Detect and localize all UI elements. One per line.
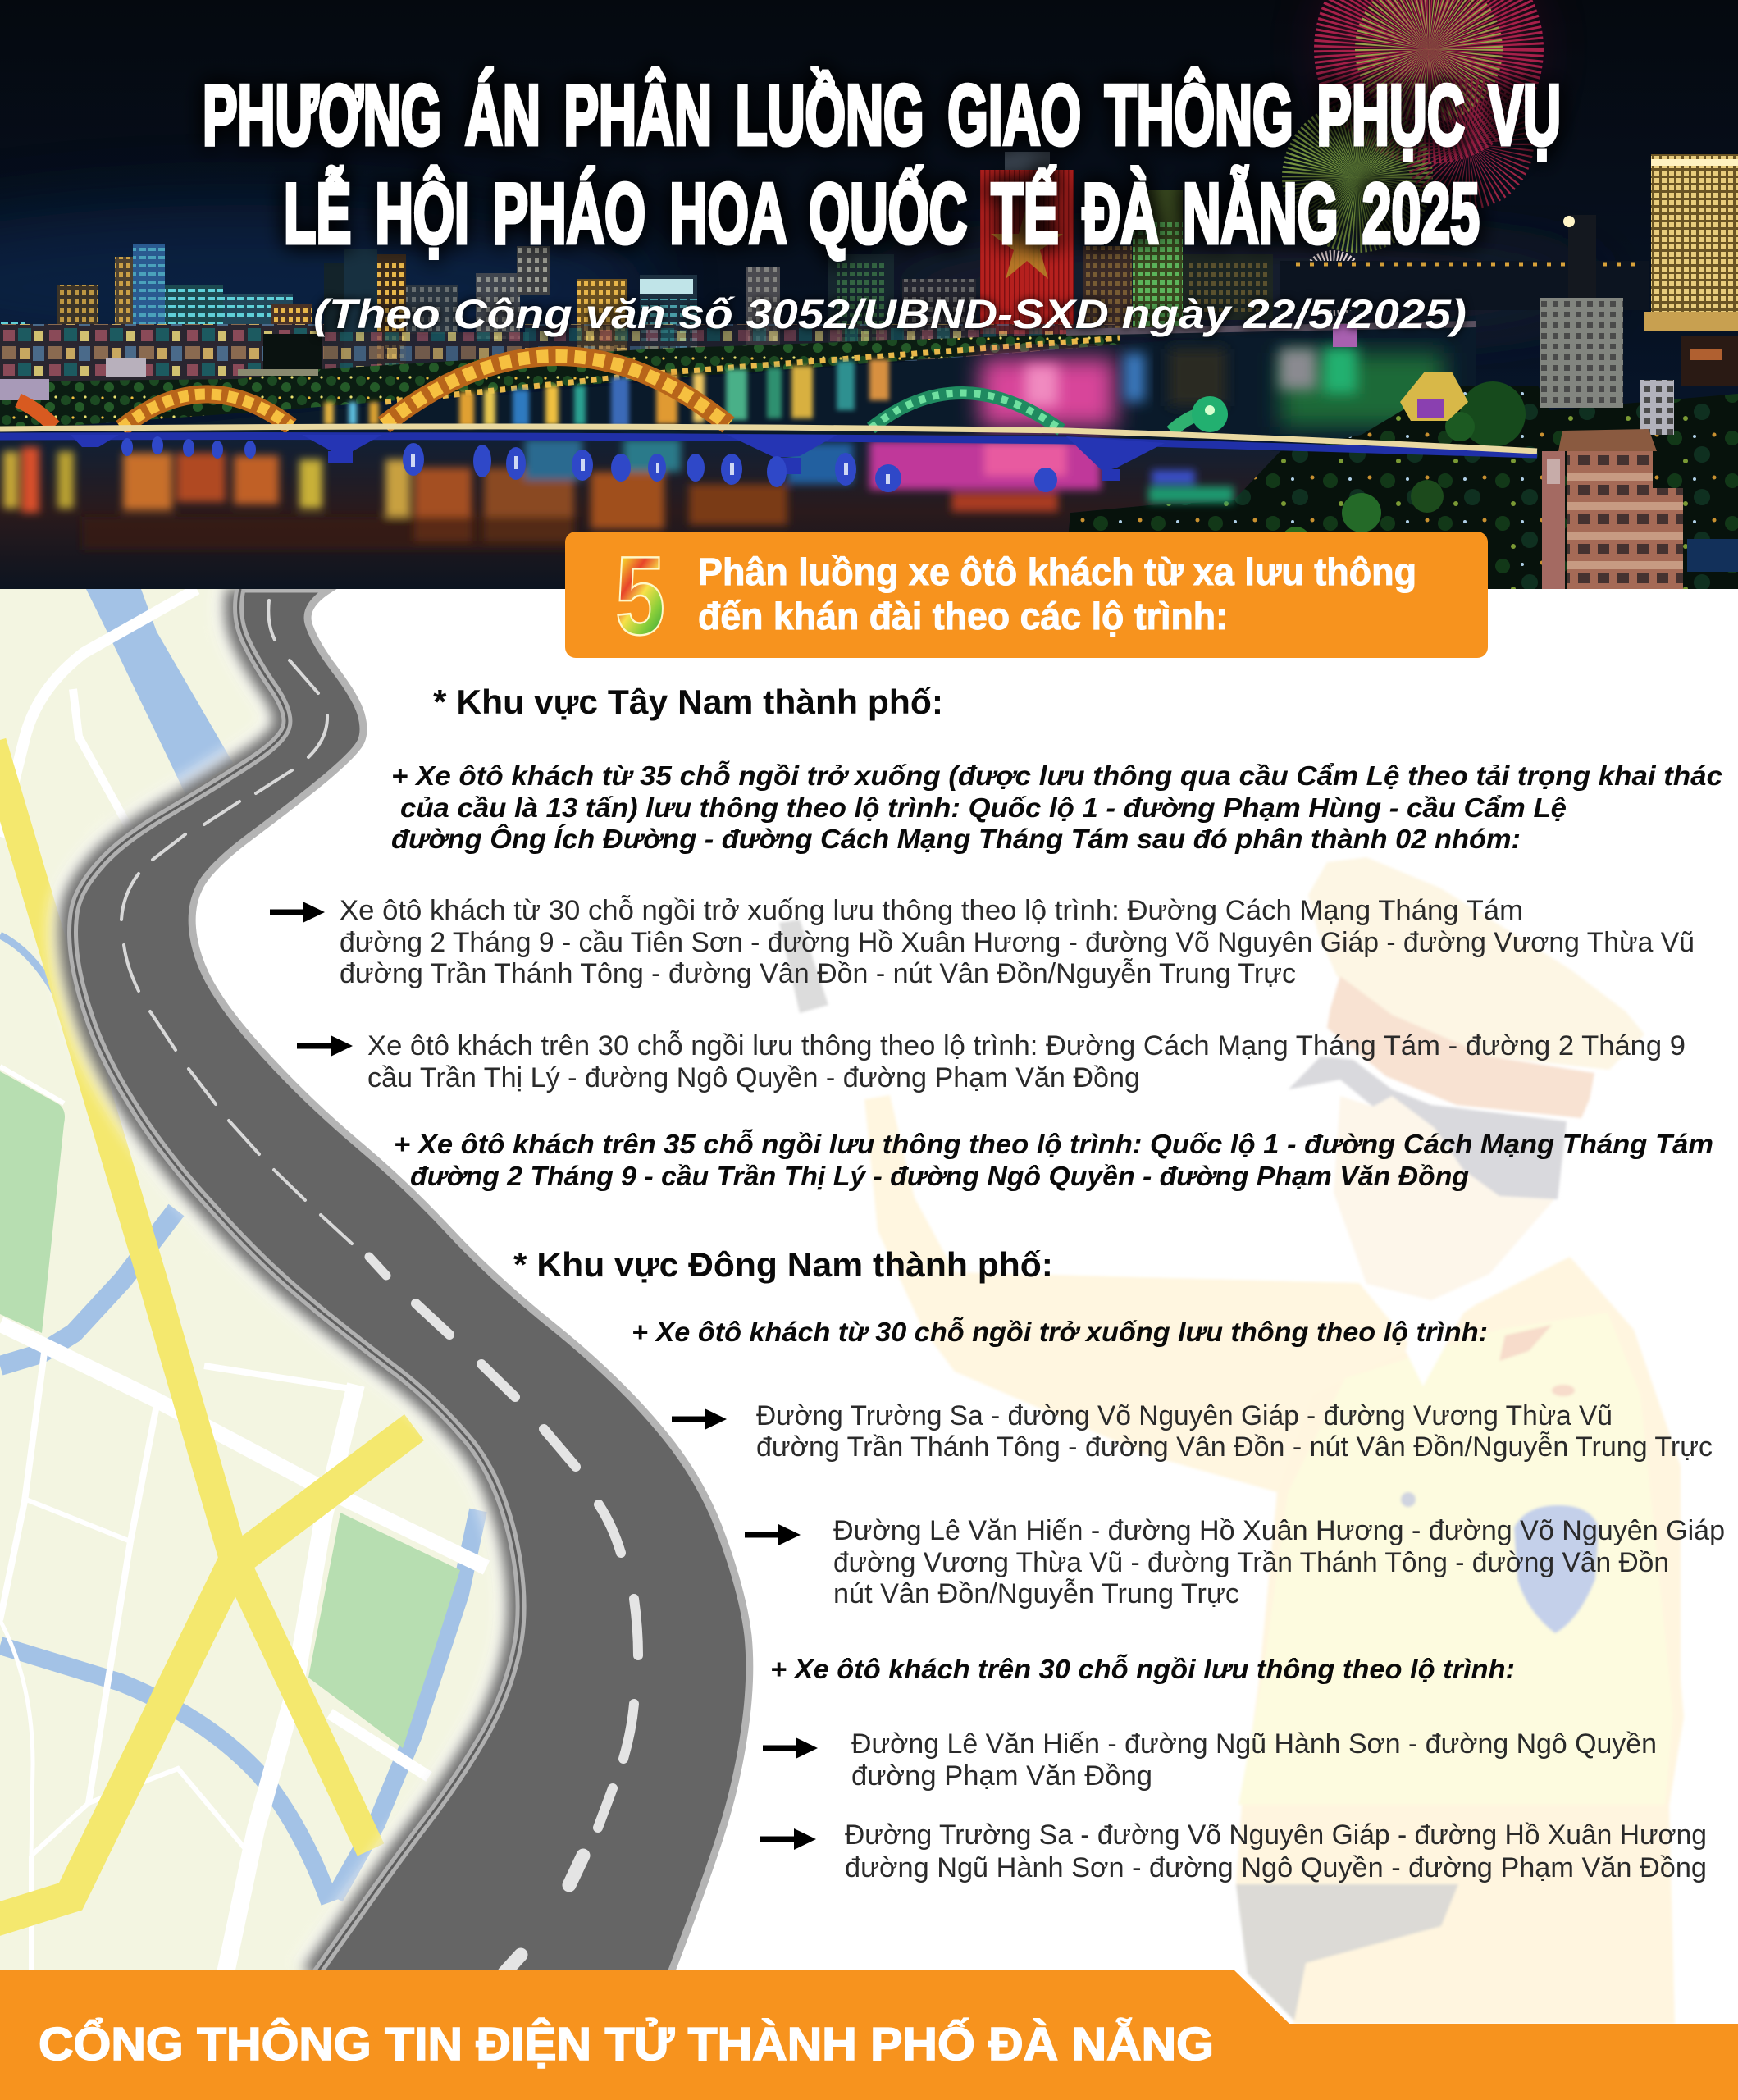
brick tower <box>1542 429 1683 589</box>
heading text: Phân luồng xe ôtô khách từ xa lưu thông <box>698 550 1416 593</box>
lower water <box>0 435 1280 589</box>
heading text: đến khán đài theo các lộ trình: <box>698 595 1228 637</box>
heading: Tây Nam area: * Khu vực Tây Nam thành phố: <box>433 682 943 721</box>
text block: Ngũ Hành Sơn route <box>851 1728 1657 1792</box>
text block: up to 30 seats route: Xe ôtô khách từ 30 chỗ ngồi trở xuống lưu thông theo lộ trình: Đường Cách Mạng Tháng Tám <box>340 895 1523 926</box>
text block: vehicles up to 35 seats: + Xe ôtô khách từ 35 chỗ ngồi trở xuống (được lưu thông qua cầu Cẩm Lệ theo tải trọng khai thác <box>391 760 1722 791</box>
riverside pagoda <box>1400 372 1468 421</box>
text block: Lê Văn Hiến route: Đường Lê Văn Hiến - đường Hồ Xuân Hương - đường Võ Nguyên Giáp <box>833 1515 1725 1546</box>
text block: Trường Sa to Phạm Văn Đồng route <box>845 1819 1707 1883</box>
dragon bridge <box>18 356 1214 431</box>
text block: Ngũ Hành Sơn route: Đường Lê Văn Hiến - đường Ngũ Hành Sơn - đường Ngô Quyền <box>851 1728 1657 1760</box>
text block: vehicles up to 35 seats: của cầu là 13 tấn) lưu thông theo lộ trình: Quốc lộ 1 - đường Phạm Hùng - cầu Cẩm Lệ <box>400 792 1567 823</box>
arrow <box>297 1035 353 1057</box>
text block: vehicles up to 35 seats: đường Ông Ích Đường - đường Cách Mạng Tháng Tám sau đó phân thành 02 nhóm: <box>391 823 1521 854</box>
watermark: traffic police officer <box>779 857 1684 2024</box>
text block: Trường Sa route: đường Trần Thánh Tông - đường Vân Đồn - nút Vân Đồn/Nguyễn Trung Trực <box>756 1431 1713 1463</box>
arrow <box>760 1828 816 1850</box>
arrow <box>763 1737 818 1759</box>
text block: over 35 seats: + Xe ôtô khách trên 35 chỗ ngồi lưu thông theo lộ trình: Quốc lộ 1 - đường Cách Mạng Tháng Tám <box>394 1129 1713 1159</box>
text block: over 30 seats route: Xe ôtô khách trên 30 chỗ ngồi lưu thông theo lộ trình: Đường Cách Mạng Tháng Tám - đường 2 Tháng 9 <box>367 1030 1686 1061</box>
header photo: Da Nang night skyline <box>0 0 1738 589</box>
text block: Lê Văn Hiến route: nút Vân Đồn/Nguyễn Trung Trực <box>833 1578 1239 1609</box>
right bank <box>1063 386 1738 589</box>
icon: number 5: 5 <box>615 533 665 658</box>
text block: Trường Sa to Phạm Văn Đồng route: đường Ngũ Hành Sơn - đường Ngô Quyền - đường Phạm Văn Đồng <box>845 1852 1707 1883</box>
text block: over 35 seats: đường 2 Tháng 9 - cầu Trần Thị Lý - đường Ngô Quyền - đường Phạm Văn Đồng <box>410 1161 1469 1191</box>
arrow <box>270 902 325 923</box>
text block: Lê Văn Hiến route <box>833 1515 1725 1609</box>
arrow <box>745 1524 801 1545</box>
text block: over 30 seats heading: + Xe ôtô khách trên 30 chỗ ngồi lưu thông theo lộ trình: <box>770 1654 1515 1684</box>
text block: Trường Sa route: Đường Trường Sa - đường Võ Nguyên Giáp - đường Vương Thừa Vũ <box>756 1400 1613 1431</box>
heading: Đông Nam area: * Khu vực Đông Nam thành phố: <box>513 1245 1053 1284</box>
text block: up to 30 seats route: đường 2 Tháng 9 - cầu Tiên Sơn - đường Hồ Xuân Hương - đường Võ Nguyên Giáp - đường Vương Thừa Vũ <box>340 927 1695 958</box>
text block: Trường Sa to Phạm Văn Đồng route: Đường Trường Sa - đường Võ Nguyên Giáp - đường Hồ Xuân Hương <box>845 1819 1707 1851</box>
text block: Trường Sa route <box>756 1400 1713 1463</box>
text block: Ngũ Hành Sơn route: đường Phạm Văn Đồng <box>851 1760 1152 1792</box>
text block: over 30 seats route: cầu Trần Thị Lý - đường Ngô Quyền - đường Phạm Văn Đồng <box>367 1062 1140 1093</box>
text block: vehicles up to 35 seats <box>391 760 1722 854</box>
footer banner: CỔNG THÔNG TIN ĐIỆN TỬ THÀNH PHỐ ĐÀ NẴNG <box>39 2017 1214 2070</box>
text block: up to 30 seats route: đường Trần Thánh Tông - đường Vân Đồn - nút Vân Đồn/Nguyễn Trung Trực <box>340 958 1296 989</box>
river <box>319 320 1476 438</box>
heading text <box>698 550 1416 637</box>
text block: over 30 seats route <box>367 1030 1686 1093</box>
subtitle: (Theo Công văn số 3052/UBND-SXD ngày 22/5/2025) <box>313 291 1467 337</box>
map illustration <box>0 589 516 1970</box>
road <box>72 589 750 1977</box>
text block: over 35 seats <box>394 1129 1713 1191</box>
text block: up to 30 seats route <box>340 895 1695 989</box>
text block: up to 30 seats heading: + Xe ôtô khách từ 30 chỗ ngồi trở xuống lưu thông theo lộ trình: <box>632 1317 1488 1347</box>
text block: Lê Văn Hiến route: đường Vương Thừa Vũ - đường Trần Thánh Tông - đường Vân Đồn <box>833 1547 1669 1578</box>
panel: orange section heading <box>565 532 1488 658</box>
footer banner <box>0 1970 1738 2100</box>
arrow <box>672 1408 727 1430</box>
fireworks <box>1308 0 1519 299</box>
title <box>203 67 1561 262</box>
skyline <box>0 152 1738 431</box>
